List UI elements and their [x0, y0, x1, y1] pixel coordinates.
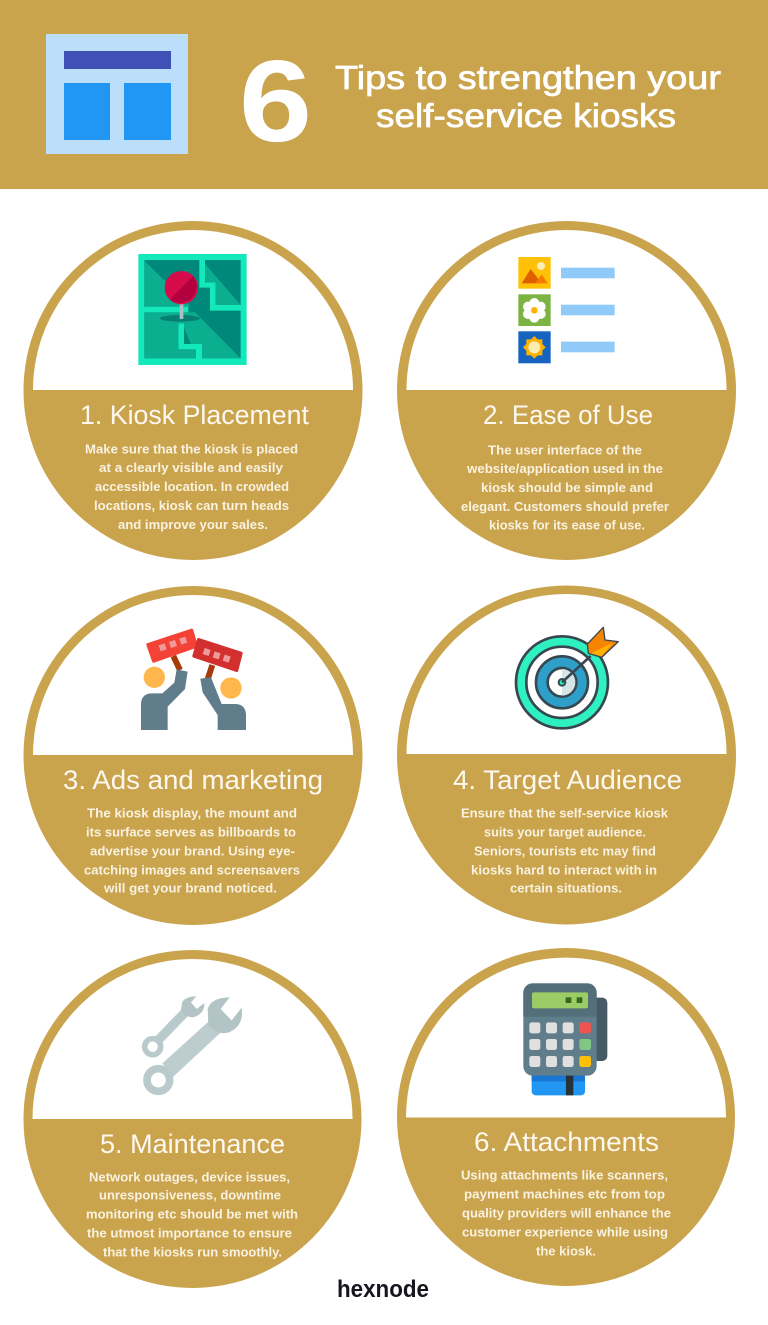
panel: 5. Maintenance: [24, 950, 362, 1288]
text block: quality providers will enhance the: [462, 1206, 671, 1220]
text block: Make sure that the kiosk is placed: [85, 442, 298, 456]
text block: unresponsiveness, downtime: [99, 1188, 281, 1202]
text block: advertise your brand. Using eye-: [90, 844, 295, 858]
text block: certain situations.: [510, 880, 622, 896]
title: Tips to strengthen your: [335, 60, 721, 97]
text block: website/application used in the: [466, 461, 663, 476]
icon: wrenches: [145, 996, 242, 1091]
icon: image list: [518, 257, 615, 363]
logo: hexnode: hexnode: [337, 1276, 429, 1303]
heading: 4. Target Audience: [453, 765, 682, 795]
text block: accessible location. In crowded: [95, 479, 289, 494]
text block: elegant. Customers should prefer: [461, 499, 669, 514]
text block: that the kiosks run smoothly.: [103, 1244, 282, 1260]
icon: target with arrow: [516, 627, 618, 728]
text block: payment machines etc from top: [464, 1186, 665, 1202]
text block: Ensure that the self-service kiosk: [461, 806, 669, 820]
text block: locations, kiosk can turn heads: [94, 498, 289, 513]
text block: and improve your sales.: [118, 517, 268, 532]
heading: 1. Kiosk Placement: [80, 400, 310, 430]
text block: [461, 442, 669, 532]
text block: at a clearly visible and easily: [99, 460, 284, 475]
text block: [86, 1170, 298, 1260]
text block: monitoring etc should be met with: [86, 1206, 298, 1222]
panel: 3. Ads and marketing: [24, 586, 362, 925]
icon: kiosk layout: [46, 34, 188, 154]
panel: 4. Target Audience: [397, 586, 736, 924]
heading: 2. Ease of Use: [483, 400, 653, 430]
text block: kiosk should be simple and: [481, 480, 653, 495]
text block: the utmost importance to ensure: [87, 1226, 292, 1240]
text block: customer experience while using: [462, 1224, 668, 1240]
big number 6: 6: [239, 36, 312, 166]
text block: catching images and screensavers: [84, 862, 300, 878]
text block: The user interface of the: [488, 442, 642, 458]
text block: The kiosk display, the mount and: [87, 806, 297, 820]
text block: will get your brand noticed.: [103, 880, 277, 896]
text block: suits your target audience.: [484, 824, 646, 840]
text block: Seniors, tourists etc may find: [474, 844, 656, 858]
text block: its surface serves as billboards to: [86, 824, 296, 840]
panel: 6. Attachments: [397, 948, 735, 1286]
icon: people holding signs: [141, 630, 246, 730]
header banner: [0, 0, 768, 189]
text block: [461, 806, 669, 896]
title: self-service kiosks: [376, 98, 676, 135]
heading: 6. Attachments: [474, 1127, 659, 1157]
panel: 1. Kiosk Placement: [24, 221, 362, 560]
icon: payment terminal: [523, 983, 607, 1095]
text block: [84, 806, 300, 896]
text block: [85, 442, 298, 532]
icon: map with pin: [138, 254, 247, 365]
text block: kiosks for its ease of use.: [489, 518, 645, 532]
title: [335, 60, 721, 135]
text block: Network outages, device issues,: [89, 1170, 290, 1184]
text block: the kiosk.: [536, 1244, 596, 1258]
text block: [461, 1168, 671, 1258]
text block: Using attachments like scanners,: [461, 1168, 668, 1182]
text block: kiosks hard to interact with in: [471, 862, 657, 878]
panel: 2. Ease of Use: [397, 221, 736, 560]
heading: 5. Maintenance: [100, 1129, 285, 1159]
heading: 3. Ads and marketing: [63, 765, 323, 795]
